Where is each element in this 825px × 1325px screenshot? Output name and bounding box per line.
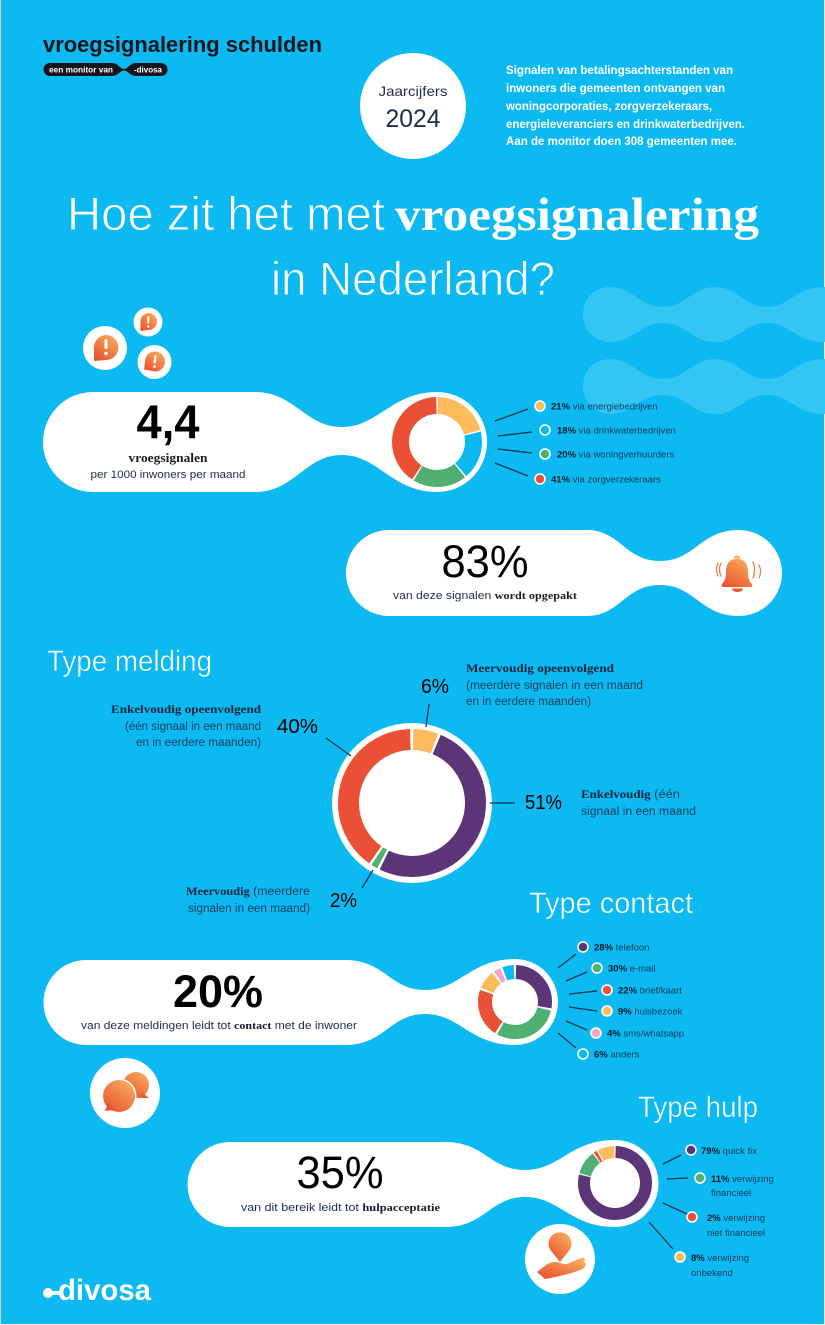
labels: type melding: 51% (525, 792, 562, 814)
panel: 4,4 vroegsignalen: vroegsignalen (128, 451, 208, 465)
legend: type hulp (649, 1145, 774, 1279)
chart: donut type hulp (584, 1152, 646, 1214)
intro text: woningcorporaties, zorgverzekeraars, (505, 101, 712, 113)
icon: bell (716, 556, 760, 592)
panel: 35% hulpacceptatie (188, 1140, 658, 1227)
labels: type melding: Meervoudig opeenvolgend (466, 663, 615, 675)
legend: type hulp: niet financieel (707, 1228, 765, 1239)
legend: type hulp: 11% verwijzing (711, 1174, 774, 1185)
panel: 20% contact: van deze meldingen leidt tot contact met de inwoner (81, 1020, 357, 1032)
logo: vroegsignalering schulden: -divosa (134, 66, 163, 74)
legend: bronnen vroegsignalen: 21% via energiebedrijven (551, 402, 658, 412)
chart: donut type contact (485, 972, 545, 1032)
legend: type contact (558, 942, 684, 1060)
labels: type melding: Enkelvoudig (één (581, 789, 680, 801)
labels: type melding: en in eerdere maanden) (466, 696, 591, 708)
chart: donut type melding (332, 723, 492, 883)
title: in Nederland? (271, 252, 555, 305)
logo: vroegsignalering schulden (43, 32, 322, 76)
decorative wave bands (583, 287, 825, 414)
icon: speech bubbles (90, 1058, 160, 1128)
legend: bronnen vroegsignalen: 41% via zorgverzekeraars (551, 474, 661, 486)
icon: alert bubbles (83, 308, 172, 379)
labels: type melding: signaal in een maand (581, 806, 696, 818)
heading: Type melding: Type melding (47, 645, 212, 678)
labels: type melding: (één signaal in een maand (125, 721, 261, 733)
legend: type contact: 6% anders (594, 1050, 640, 1060)
panel: 83% opgepakt: van deze signalen wordt opgepakt (393, 590, 577, 602)
legend: type hulp: 2% verwijzing (707, 1213, 765, 1224)
labels: type melding: Meervoudig (meerdere (186, 886, 310, 898)
labels: type melding: 40% (277, 716, 318, 738)
panel: 4,4 vroegsignalen: per 1000 inwoners per maand (90, 469, 246, 481)
legend: type hulp: financieel (711, 1188, 751, 1199)
legend: type contact: 4% sms/whatsapp (607, 1028, 684, 1040)
logo: vroegsignalering schulden: vroegsignalering schulden (43, 32, 322, 57)
labels: type melding: 6% (421, 676, 449, 698)
logo: divosa: divosa (58, 1274, 151, 1307)
legend: type hulp: 8% verwijzing (691, 1253, 749, 1264)
legend: type contact: 30% e-mail (608, 964, 656, 974)
legend: type contact: 28% telefoon (594, 942, 649, 954)
intro text (505, 65, 745, 148)
panel: 35% hulpacceptatie: van dit bereik leidt tot hulpacceptatie (241, 1202, 440, 1214)
legend: type contact: 9% huisbezoek (618, 1006, 683, 1018)
title: vroegsignalering (395, 189, 760, 241)
badge: Jaarcijfers 2024 (360, 53, 466, 159)
labels: type melding: signalen in een maand) (188, 903, 310, 915)
labels: type melding: en in eerdere maanden) (136, 737, 261, 749)
badge: Jaarcijfers 2024: Jaarcijfers (378, 83, 448, 99)
panel: 83% opgepakt: 83% (442, 536, 528, 587)
legend: type hulp: onbekend (691, 1268, 733, 1279)
chart: donut bronnen vroegsignalen (400, 406, 474, 478)
legend: type hulp: 79% quick fix (701, 1146, 757, 1157)
panel: 20% contact: 20% (173, 966, 263, 1017)
panel: 4,4 vroegsignalen: 4,4 (136, 395, 200, 448)
panel: 20% contact (44, 959, 558, 1045)
intro text: energieleveranciers en drinkwaterbedrijven. (506, 119, 745, 131)
legend: bronnen vroegsignalen: 20% via woningverhuurders (557, 450, 674, 460)
panel: 83% opgepakt (346, 530, 782, 616)
panel: 4,4 vroegsignalen (43, 392, 487, 492)
labels: type melding (111, 663, 696, 915)
logo: vroegsignalering schulden: een monitor van (49, 66, 113, 74)
intro text: Signalen van betalingsachterstanden van (506, 65, 733, 77)
heading: Type hulp: Type hulp (638, 1091, 758, 1124)
labels: type melding: 2% (330, 890, 357, 912)
badge: Jaarcijfers 2024: 2024 (386, 105, 441, 133)
labels: type melding: (meerdere signalen in een maand (466, 680, 643, 692)
intro text: Aan de monitor doen 308 gemeenten mee. (506, 136, 737, 148)
legend: type contact: 22% brief/kaart (618, 986, 682, 996)
panel: 35% hulpacceptatie: 35% (296, 1147, 384, 1198)
legend: bronnen vroegsignalen: 18% via drinkwaterbedrijven (557, 426, 676, 436)
icon: hand with drop (525, 1224, 595, 1294)
heading: Type contact: Type contact (529, 887, 694, 920)
title (67, 187, 760, 305)
labels: type melding: Enkelvoudig opeenvolgend (111, 704, 262, 716)
title: Hoe zit het met (67, 187, 385, 240)
intro text: inwoners die gemeenten ontvangen van (506, 83, 725, 95)
legend: bronnen vroegsignalen (495, 401, 676, 486)
